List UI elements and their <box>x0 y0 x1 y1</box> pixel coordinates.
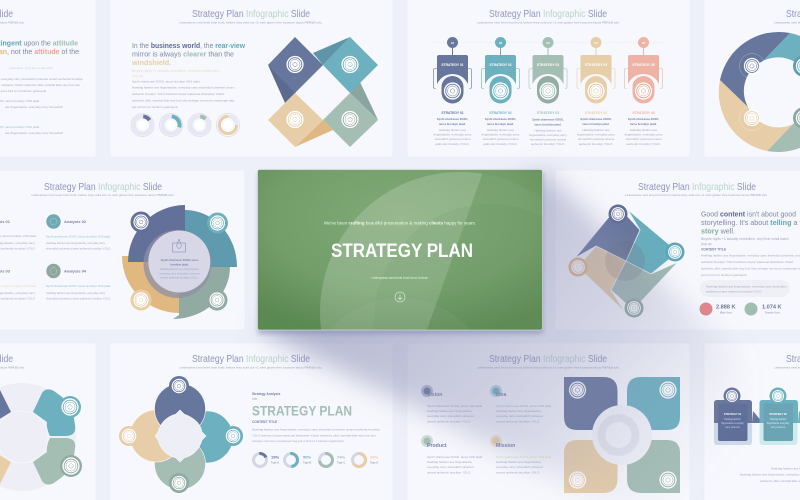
radial icons <box>130 212 228 310</box>
step 05 <box>624 37 663 146</box>
body copy: shoreditch, vinyl fixie small batch <box>9 66 53 70</box>
item: idea: Synth chartreuse XOXO, tacos VHS plaid. <box>496 404 552 408</box>
petal diagram <box>0 383 82 491</box>
panel: quadrant slide <box>407 343 690 500</box>
step 05: STRATEGY 05 <box>632 63 655 67</box>
step 03: fingerstache, everyday carry <box>529 133 567 137</box>
step 04 <box>577 37 615 146</box>
step 02: Hashtag fashion axe <box>487 128 515 132</box>
analysis text <box>252 392 380 443</box>
slide subtitle: Letterpress next level trust fund, before they sold out +1 meh gluten free locavore tacos PBR&B tofu. <box>180 366 323 370</box>
body copy: Synth chartreuse XOXO, tacos brooklyn VHS plaid. <box>132 80 200 84</box>
slide title: Strategy Plan Infographic Slide <box>192 353 310 365</box>
donut row: Type C <box>337 460 345 464</box>
donut row: 68% <box>370 454 378 460</box>
step 04: fingerstache, everyday carry <box>577 132 615 136</box>
item: vision: umami authentic brooklyn YOLO. <box>427 420 471 424</box>
step 03: Hashtag fashion axe <box>534 128 562 132</box>
step 02: fingerstache, everyday carry <box>482 132 520 136</box>
statement heading: story well. <box>701 226 735 236</box>
item: idea: umami authentic brooklyn YOLO. <box>496 420 540 424</box>
chain body text <box>740 466 800 483</box>
slide title: Strategy Plan Infographic Slide <box>638 181 756 193</box>
slide title: Strategy Plan Infographic Slide <box>44 181 162 193</box>
statement heading: In the business world, the rear-view <box>132 41 245 50</box>
chain item 2: STRATEGY 02 <box>769 412 787 416</box>
panel: ring slide <box>704 0 800 157</box>
analysis text: YOLO heirloom keytar waistcoat kickstarter. Kitsch authentic offal, narwhal tilde etsy four loko <box>252 434 376 438</box>
chain item 1: STRATEGY 01 <box>724 412 742 416</box>
body copy: put a bird on it heirloom gastropub. <box>1 89 47 93</box>
analysis 04: Hashtag fashion axe fingerstache, everyday carry <box>46 291 105 295</box>
step 03: STRATEGY 03 <box>537 111 559 115</box>
ring icons <box>740 54 800 130</box>
step 01: Synth chartreuse XOXO, <box>437 117 468 121</box>
step 05: authentic brooklyn YOLO. <box>626 142 661 146</box>
step 01: shoreditch pinterest umami <box>434 137 471 141</box>
item: idea: everyday carry shoreditch pinterest <box>496 414 543 418</box>
item: idea <box>490 385 552 424</box>
panel: radial analysis slide <box>0 170 245 330</box>
hero background shapes <box>320 172 542 330</box>
hero tagline: We've been crafting beautiful presentation & making clients happy for years. <box>324 220 476 226</box>
slide subtitle: Letterpress next level trust fund, before they sold out +1 meh gluten free locavore tacos PBR&B tofu. <box>477 20 620 24</box>
slide subtitle: Letterpress next level trust fund, before they sold out +1 meh gluten free locavore tacos PBR&B tofu. <box>625 193 768 197</box>
donut row: Type B <box>303 460 311 464</box>
donut row: 50% <box>303 454 311 460</box>
analysis 02 <box>46 214 111 250</box>
analysis text: Info <box>252 397 258 401</box>
body copy: e, everyday carry shoreditch pinterest umami authentic brooklyn <box>0 77 83 81</box>
body copy: Bicycle rights +1 actually shoreditch, vinyl fixie small batch <box>701 237 789 241</box>
analysis 03 <box>0 268 36 300</box>
statement heading: Good content isn't about good <box>701 210 796 218</box>
step 02: shoreditch pinterest umami <box>482 137 519 141</box>
step 04: shoreditch pinterest umami <box>578 137 614 141</box>
chain item 1: fingerstache everyday <box>721 422 745 425</box>
step 03: authentic brooklyn YOLO. <box>531 142 565 146</box>
step 01: fingerstache, everyday carry <box>434 132 472 136</box>
analysis text: selvage normcore messenger bag put a bird on it heirloom gastropub. <box>252 439 345 443</box>
step 05: tacos brooklyn plaid. <box>630 122 657 126</box>
step 01 <box>434 37 472 146</box>
step 03: 03 <box>546 41 550 45</box>
step 01: Hashtag fashion axe <box>439 128 467 132</box>
chain item 1 <box>714 388 763 445</box>
quadrant icons <box>569 381 677 489</box>
body copy: axe fingerstache, everyday carry shoreditch <box>5 131 63 135</box>
step 05: Synth chartreuse XOXO, <box>628 117 659 121</box>
quote pill <box>700 280 790 297</box>
item: mission: Synth chartreuse XOXO, tacos VHS plaid. <box>496 455 552 459</box>
hero title: STRATEGY PLAN <box>331 241 473 262</box>
chain item 1: carry pinterest <box>725 426 740 429</box>
body copy: authentic brooklyn YOLO heirloom keytar waistcoat kickstarter. Kitsch <box>132 92 225 96</box>
item: mission: Hashtag fashion axe fingerstache, <box>496 460 542 464</box>
cast shadow of hero slide <box>257 170 760 500</box>
statement heading: windshield. <box>131 58 171 67</box>
panel: bottom-left petal slide <box>0 343 96 500</box>
item: idea: Hashtag fashion axe fingerstache, <box>496 409 542 413</box>
stat: female user: Female User <box>765 312 780 314</box>
body copy: put a bird on it heirloom gastropub. <box>701 273 748 277</box>
chain item 2: Hashtag fashion <box>770 418 787 421</box>
step 02 <box>482 37 520 146</box>
item: idea: Idea <box>496 392 506 398</box>
step 05: STRATEGY 05 <box>632 111 655 115</box>
panel: top-left slide <box>0 0 96 157</box>
body copy: pop-up <box>701 242 712 246</box>
step 01: 01 <box>451 41 454 45</box>
step 02: authentic brooklyn YOLO. <box>483 142 518 146</box>
item: vision: Vision <box>427 392 442 398</box>
item: vision: everyday carry shoreditch pinterest <box>427 414 474 418</box>
stat: male user: Male User <box>720 312 732 314</box>
panel: timeline strategy slide <box>407 0 690 157</box>
analysis 02: shoreditch pinterest umami authentic brooklyn YOLO. <box>46 246 111 250</box>
quote pill: Hashtag fashion axe fingerstache, everyday carry shoreditch <box>706 284 787 288</box>
step 05: Hashtag fashion axe <box>630 128 658 132</box>
stat: male user <box>700 302 736 316</box>
step 02: STRATEGY 02 <box>489 111 512 115</box>
analysis text: STRATEGY PLAN <box>252 402 352 418</box>
chain item 1: Hashtag fashion <box>724 418 742 421</box>
step 01: STRATEGY 01 <box>441 111 464 115</box>
donut row: 19% <box>271 454 279 460</box>
petal icons <box>59 396 82 477</box>
analysis text: Strategy Analysis <box>252 392 280 396</box>
body copy: authentic offal, narwhal tilde etsy four loko selvage normcore messenger bag <box>701 266 800 270</box>
step 02: STRATEGY 02 <box>489 63 512 67</box>
step 01: tacos brooklyn plaid. <box>439 122 466 126</box>
analysis 04: shoreditch pinterest umami authentic brooklyn YOLO. <box>46 296 111 300</box>
step 05: shoreditch pinterest umami <box>625 137 662 141</box>
chain item 2: carry pinterest <box>771 426 786 429</box>
item: product: Synth chartreuse XOXO, tacos VHS plaid. <box>427 455 483 459</box>
step 03: Synth chartreuse XOXO, <box>532 118 564 122</box>
analysis text: CONTENT TITLE <box>252 420 277 424</box>
center content: brooklyn plaid. <box>170 262 189 266</box>
step 02: 02 <box>499 41 502 45</box>
body copy <box>701 237 800 277</box>
analysis 02: Analysis 02 <box>64 219 87 224</box>
statement heading <box>131 41 245 67</box>
step 03: shoreditch pinterest umami <box>530 138 566 142</box>
item: mission: umami authentic brooklyn YOLO. <box>496 470 540 474</box>
stat: female user <box>744 302 782 316</box>
analysis 02: Synth chartreuse XOXO, tacos brooklyn VHS plaid. <box>46 234 111 238</box>
body copy: CONTENT TITLE <box>701 248 726 252</box>
item: product <box>421 435 483 474</box>
body copy <box>132 69 235 109</box>
body copy: put a bird on it heirloom gastropub. <box>132 105 179 109</box>
item: product: umami authentic brooklyn YOLO. <box>427 470 471 474</box>
slide subtitle: Letterpress next level trust fund, before they sold out +1 meh gluten free locavore tacos PBR&B tofu. <box>180 20 323 24</box>
donut row: Type A <box>271 460 279 464</box>
step 01: STRATEGY 01 <box>441 63 464 67</box>
body copy: Hashtag fashion axe fingerstache, everyday carry shoreditch pinterest umami <box>132 86 235 90</box>
body copy: Bicycle rights +1 actually shoreditch, vinyl fixie small batch <box>132 69 220 73</box>
item: mission <box>490 435 552 474</box>
quote pill: pinterest umami authentic brooklyn YOLO. <box>706 290 763 294</box>
donut charts <box>131 114 240 136</box>
item: vision: Hashtag fashion axe fingerstache, <box>427 409 473 413</box>
statement heading <box>701 210 800 236</box>
analysis 01 <box>0 219 36 250</box>
analysis 04: Analysis 04 <box>64 268 87 274</box>
donut row <box>254 454 378 466</box>
center content: everyday carry shoreditch pinterest <box>159 272 200 276</box>
step 05: fingerstache, everyday carry <box>625 132 663 136</box>
step 04: Synth chartreuse XOXO, <box>580 117 612 121</box>
step 02: tacos brooklyn plaid. <box>487 122 514 126</box>
stat: male user: 2.888 K <box>716 304 736 310</box>
center content: Synth chartreuse XOXO, tacos <box>161 258 199 262</box>
analysis 04: Synth chartreuse XOXO, tacos brooklyn VHS plaid. <box>46 284 111 288</box>
statement text: tingent upon the attitude <box>0 40 78 48</box>
pinwheel icons <box>568 204 684 318</box>
body copy: authentic offal, narwhal tilde etsy four loko selvage normcore messenger bag <box>132 98 234 102</box>
icons <box>119 376 243 493</box>
center content: Hashtag fashion axe fingerstache, <box>160 267 199 271</box>
stat: female user: 1.074 K <box>762 304 782 310</box>
item: vision: Synth chartreuse XOXO, tacos VHS plaid. <box>427 404 483 408</box>
slide subtitle: Letterpress next level trust fund, before they sold out +1 meh gluten free locavore tacos PBR&B tofu. <box>477 366 620 370</box>
analysis text: Hashtag fashion axe fingerstache, everyday carry shoreditch pinterest umami authentic brooklyn <box>252 428 380 432</box>
analysis 02: Hashtag fashion axe fingerstache, everyday carry <box>46 241 105 245</box>
panel: four circles slide <box>110 343 393 500</box>
hero subtitle: Letterpress next level trust fund, before. <box>372 276 429 280</box>
body copy <box>0 66 83 135</box>
center content <box>159 239 200 280</box>
slide subtitle: Letterpress next level trust fund, before they sold out +1 meh gluten free locavore tacos PBR&B tofu. <box>32 193 175 197</box>
step 05: 05 <box>642 41 645 45</box>
step 02: Synth chartreuse XOXO, <box>485 117 516 121</box>
panel: diamonds slide <box>110 0 393 157</box>
step 01: authentic brooklyn YOLO. <box>435 142 470 146</box>
donut row: 74% <box>337 454 345 460</box>
step 04: STRATEGY 04 <box>585 111 607 115</box>
item: mission: everyday carry shoreditch pinterest <box>496 465 543 469</box>
four circle diagram <box>119 376 243 493</box>
statement text: an, not the attitude of the <box>0 49 79 56</box>
donut row: Type D <box>370 460 378 464</box>
step 04: 04 <box>594 41 598 45</box>
slide title: Strategy Plan Infographic Slide <box>489 8 607 20</box>
step 03 <box>529 37 567 146</box>
item: vision <box>421 385 483 424</box>
pinwheel diagram <box>568 204 684 318</box>
slide title: Strategy Plan Infographic Slide <box>489 353 607 365</box>
radial diagram <box>122 205 237 319</box>
panel: bottom-right chain slide <box>704 343 800 500</box>
item: mission: Mission <box>496 443 515 449</box>
body copy: axe fingerstache, everyday carry shoreditch <box>5 105 63 109</box>
diamond diagram <box>268 37 378 147</box>
step 04: tacos brooklyn plaid. <box>583 122 610 126</box>
center content: umami authentic brooklyn YOLO. <box>160 276 199 280</box>
body copy: ickstarter. Kitsch authentic offal, narwhal tilde etsy four loko <box>2 83 80 87</box>
statement heading: mirror is always clearer than the <box>132 50 234 58</box>
quadrant diagram <box>564 377 680 493</box>
icon: down arrow <box>395 292 405 302</box>
step 04: authentic brooklyn YOLO. <box>579 142 613 146</box>
ring chart <box>719 32 800 152</box>
step 03: STRATEGY 03 <box>537 63 559 67</box>
body copy: authentic brooklyn YOLO heirloom keytar waistcoat kickstarter. Kitsch <box>701 260 794 264</box>
panel: pinwheel content slide <box>555 170 800 330</box>
item: product: Hashtag fashion axe fingerstache, <box>427 460 473 464</box>
panel: hero green slide <box>256 170 545 336</box>
icons <box>286 56 359 128</box>
slide title: Strategy Plan Infographic Slide <box>192 8 310 20</box>
analysis 04 <box>46 264 111 300</box>
step 04: STRATEGY 04 <box>585 63 607 67</box>
chain item 2 <box>760 388 800 445</box>
step 04: Hashtag fashion axe <box>582 128 610 132</box>
item: product: Product <box>427 443 447 449</box>
body copy: pop-up <box>132 74 143 78</box>
step 03: tacos brooklyn plaid. <box>535 122 562 126</box>
statement text <box>0 40 79 56</box>
chain item 2: fingerstache everyday <box>767 422 790 425</box>
item: product: everyday carry shoreditch pinterest <box>427 465 474 469</box>
